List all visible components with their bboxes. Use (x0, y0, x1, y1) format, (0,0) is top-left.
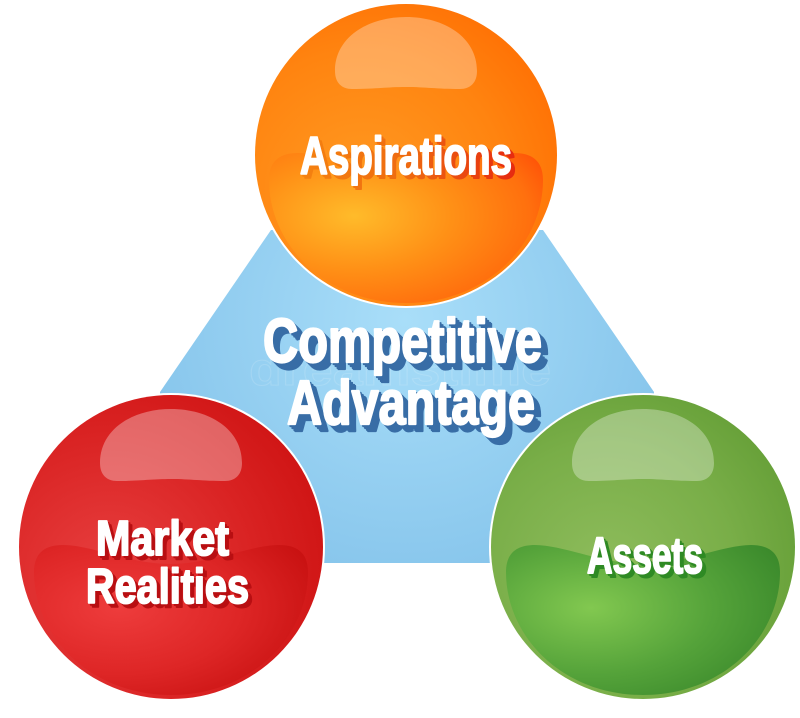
top highlight (572, 409, 714, 481)
circle: Assets (489, 393, 797, 701)
label: Assets: Assets (591, 531, 707, 588)
label: Assets: Assets (589, 529, 705, 586)
center label: Competitive Advantage: Competitive (269, 313, 548, 382)
circle: Aspirations (253, 2, 559, 308)
label: Market Realities: Market (98, 514, 231, 568)
label: Market Realities (86, 512, 253, 618)
label: Aspirations: Aspirations (300, 127, 512, 186)
center label: Competitive Advantage (263, 307, 549, 445)
triangle background panel (160, 230, 654, 563)
lower gloss (506, 545, 780, 695)
label: Assets: Assets (587, 527, 703, 584)
label: Market Realities: Market (100, 516, 233, 570)
label: Market Realities: Realities (88, 562, 251, 616)
center label: Competitive Advantage: Competitive (265, 309, 544, 378)
top highlight (100, 409, 242, 481)
center label: Competitive Advantage: Advantage (289, 371, 537, 440)
lower gloss (34, 545, 308, 695)
label: Aspirations: Aspirations (304, 131, 516, 190)
center label: Competitive Advantage: Advantage (291, 373, 539, 442)
label: Assets (587, 527, 707, 588)
label: Market Realities: Realities (86, 560, 249, 614)
watermark: dreamstime (249, 343, 551, 395)
center label: Competitive Advantage: Advantage (294, 376, 542, 445)
circle: Market Realities (17, 393, 325, 701)
center label: Competitive Advantage: Competitive (267, 311, 546, 380)
center label: Competitive Advantage: Advantage (293, 375, 541, 444)
lower gloss (269, 153, 543, 303)
center label: Competitive Advantage: Competitive (270, 314, 549, 383)
label: Market Realities: Realities (90, 564, 253, 618)
center label: Competitive Advantage: Competitive (263, 307, 542, 376)
top highlight (335, 17, 477, 89)
label: Market Realities: Market (96, 512, 229, 566)
label: Aspirations: Aspirations (302, 129, 514, 188)
center label: Competitive Advantage: Advantage (287, 369, 535, 438)
